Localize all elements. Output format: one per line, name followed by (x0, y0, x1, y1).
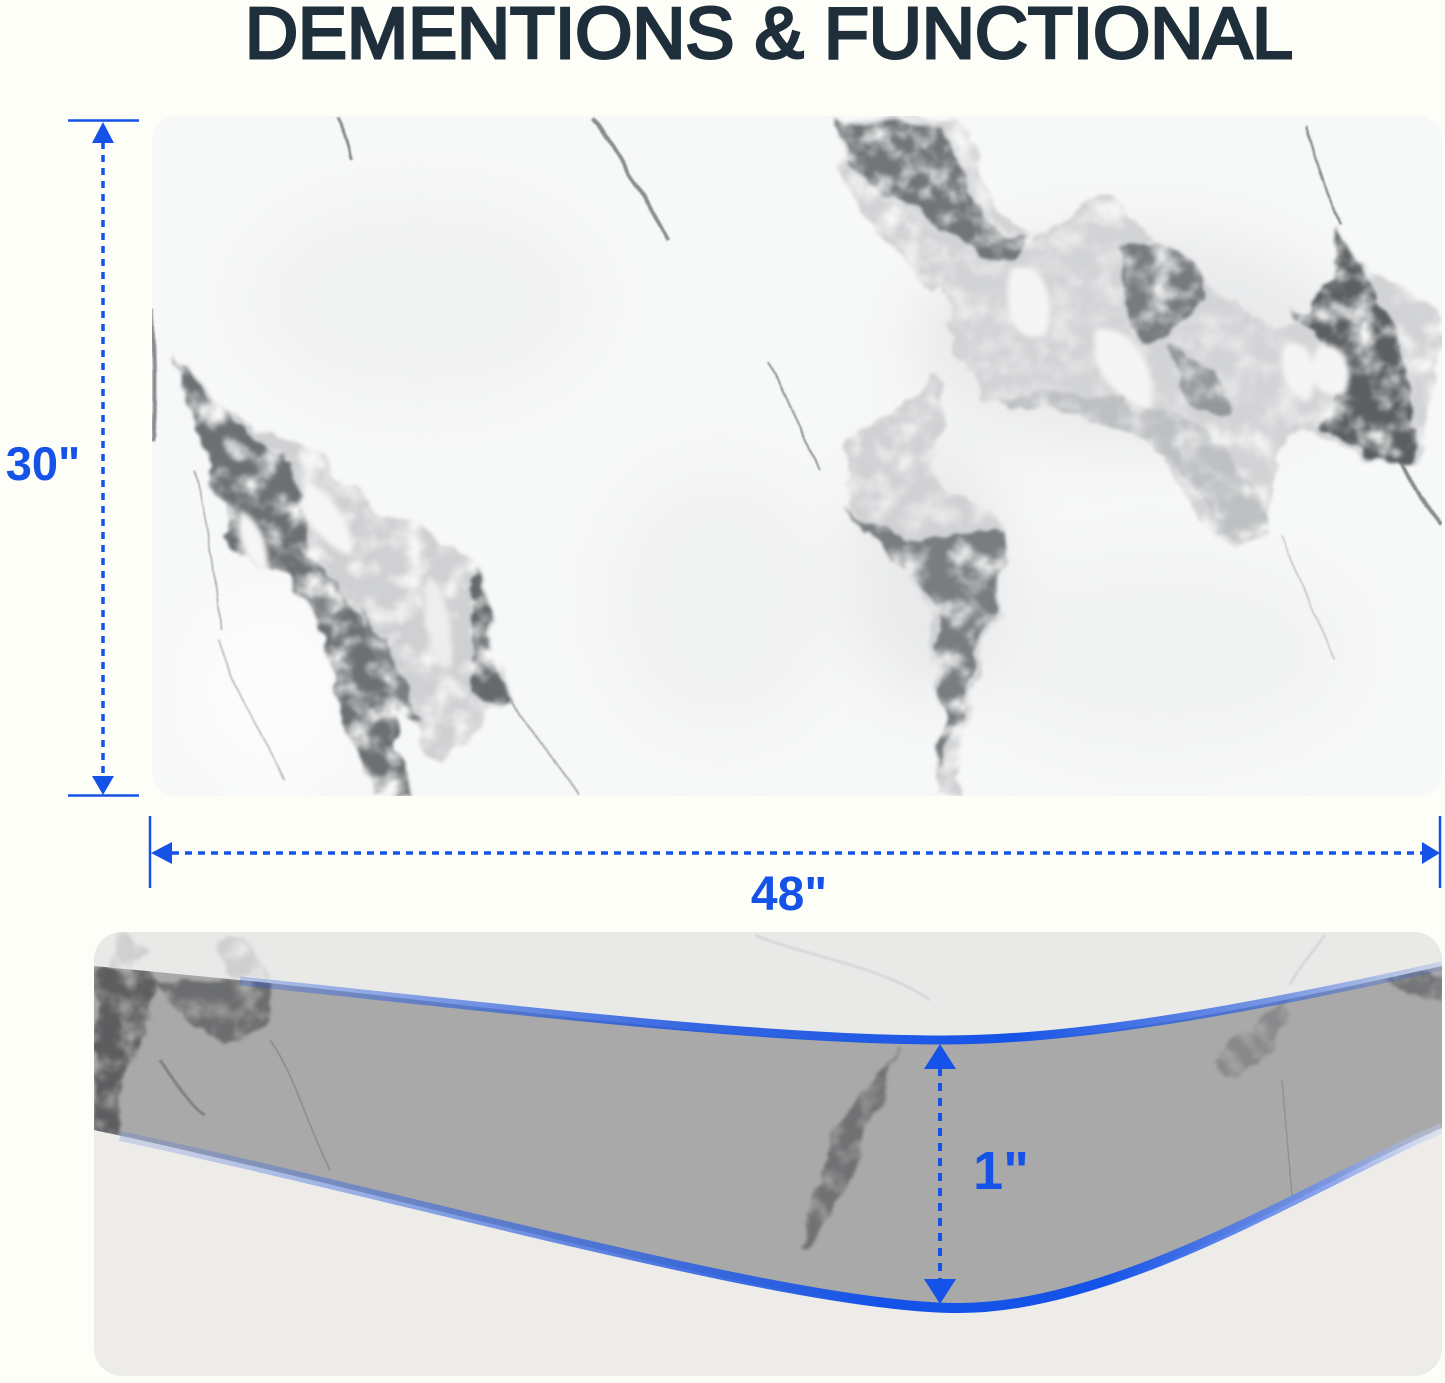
marble veins: left cluster (170, 350, 510, 796)
faint veins on top surface (110, 932, 270, 978)
dimension: 48 inch width (150, 816, 1440, 921)
marble veins: center cluster (844, 370, 1270, 796)
dimension: 48 inch width: 48" (751, 868, 827, 921)
panel: edge profile view (94, 932, 1442, 1376)
top surface (94, 932, 1442, 1044)
dimension: 30 inch height: 30" (6, 437, 80, 490)
blue edge highlights (240, 966, 1442, 1040)
dimension: 1 inch thickness (924, 1044, 1029, 1304)
marble veins: white blobs upper right (1007, 267, 1349, 410)
dimension: 30 inch height (6, 120, 139, 796)
side face of the marble (94, 966, 1442, 1303)
marble veins: white blobs left (239, 480, 452, 670)
marble veins: thin lines (152, 118, 1442, 796)
panel: marble top view (152, 116, 1442, 796)
marble veins: upper right cluster (838, 116, 1442, 552)
dimension: 1 inch thickness: 1" (973, 1141, 1029, 1201)
